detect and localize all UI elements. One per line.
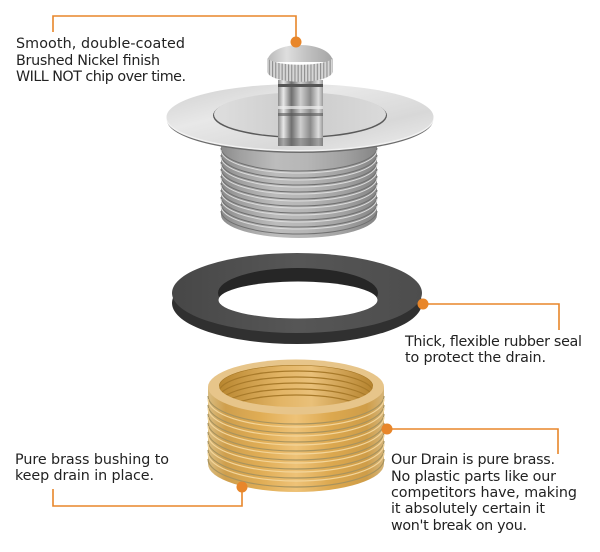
brass rim and threaded opening xyxy=(208,360,384,414)
callout: brushed nickel finish xyxy=(16,16,302,85)
callout: rubber seal: to protect the drain. xyxy=(405,350,546,366)
threaded brass exterior xyxy=(208,387,384,492)
threaded silver body xyxy=(221,140,377,238)
callout: pure brass drain: Our Drain is pure brass. xyxy=(391,452,555,468)
callout: brass bushing: Pure brass bushing to xyxy=(15,452,169,468)
image: brass bushing xyxy=(208,353,384,492)
callout: brass bushing xyxy=(15,452,248,506)
callout: brushed nickel finish: Smooth, double-coated xyxy=(16,36,185,52)
flange xyxy=(166,84,434,153)
stem xyxy=(278,80,323,146)
callout: rubber seal xyxy=(404,298,582,366)
callout: pure brass drain xyxy=(382,424,577,534)
knob xyxy=(267,45,333,82)
callout: pure brass drain: won't break on you. xyxy=(391,518,527,534)
callout: pure brass drain: it absolutely certain it xyxy=(391,501,545,517)
image: stopper and threaded drain body xyxy=(166,45,434,238)
callout: pure brass drain: competitors have, making xyxy=(391,485,577,501)
callout: pure brass drain: No plastic parts like our xyxy=(391,469,556,485)
callout: rubber seal: Thick, flexible rubber seal xyxy=(404,334,582,350)
callout: brushed nickel finish: Brushed Nickel finish xyxy=(16,53,160,69)
callout: brushed nickel finish: WILL NOT chip over time. xyxy=(16,69,186,85)
image: rubber seal xyxy=(172,253,422,344)
callout: brass bushing: keep drain in place. xyxy=(15,468,154,484)
